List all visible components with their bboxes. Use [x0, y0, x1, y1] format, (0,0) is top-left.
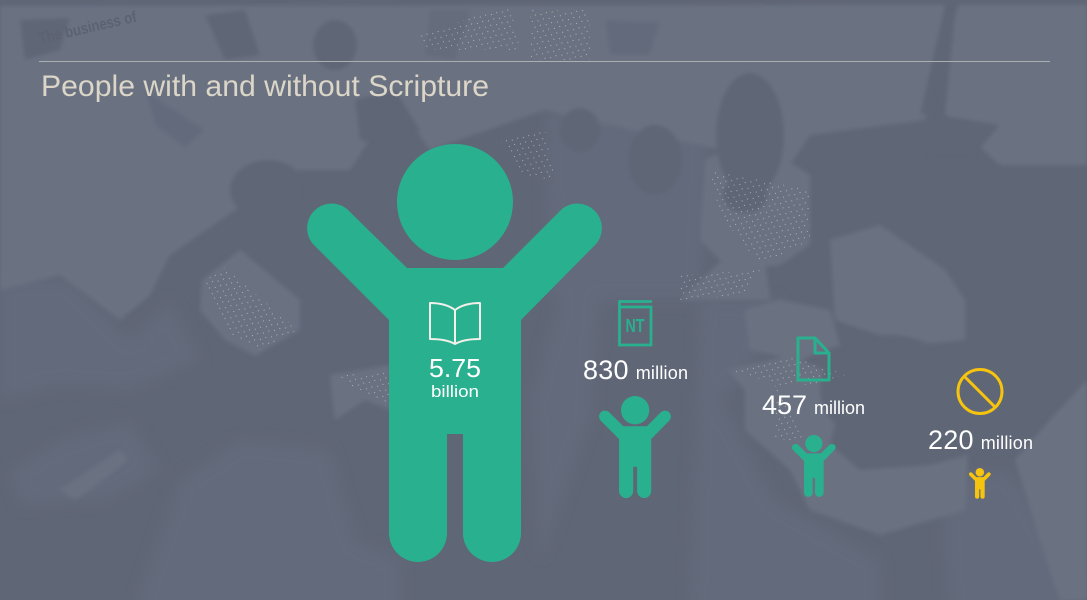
icon: prohibited sign [958, 370, 1002, 414]
stat: 830 million: 830 million [583, 355, 688, 385]
stat: 5.75 billion: billion [431, 382, 479, 401]
large figure: people with full Bible [307, 144, 602, 562]
dark shapes over light [20, 5, 1000, 445]
title: People with and without Scripture [41, 70, 489, 103]
dotted highlights [205, 5, 845, 440]
stat: 5.75 billion: 5.75 [429, 353, 481, 383]
lit face and cloth details [178, 62, 925, 224]
icon: open book [430, 303, 480, 344]
figure: 830 million [599, 396, 671, 498]
figure: 220 million [969, 468, 991, 499]
figure: 457 million [792, 435, 836, 497]
newspaper headline in photo: The business of [37, 9, 139, 48]
title rule [39, 61, 1050, 62]
stat: 220 million: 220 million [928, 425, 1033, 455]
stat: 457 million: 457 million [762, 390, 865, 420]
stat: 5.75 billion [429, 353, 481, 401]
icon: New Testament book: NT [626, 316, 644, 336]
icon: document page [798, 338, 829, 380]
icon: New Testament book [620, 302, 652, 345]
